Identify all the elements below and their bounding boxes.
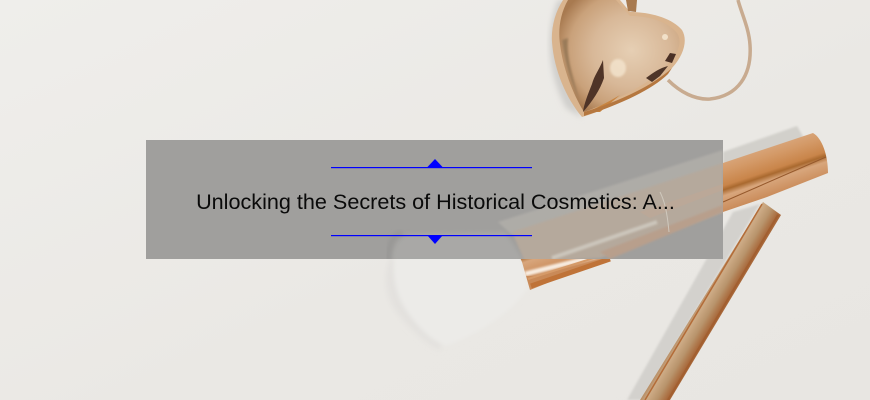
- heart pendant: [552, 0, 685, 117]
- brush handle: [512, 133, 828, 290]
- second tube: [640, 202, 781, 400]
- heart pendant shadow: [550, 0, 582, 118]
- chain: [668, 0, 750, 99]
- title: Unlocking the Secrets of Historical Cosmetics: A...: [196, 189, 675, 214]
- brush handle shadow: [723, 126, 805, 170]
- handle and brush seen through the panel: [395, 151, 723, 259]
- translucent title panel: [146, 140, 723, 259]
- brush head shadow: [386, 258, 450, 350]
- handle seam: [723, 157, 826, 202]
- second tube edge lines: [645, 204, 762, 400]
- handle lower highlight: [525, 254, 605, 274]
- second tube shadow: [627, 204, 760, 400]
- brush head: [394, 255, 528, 346]
